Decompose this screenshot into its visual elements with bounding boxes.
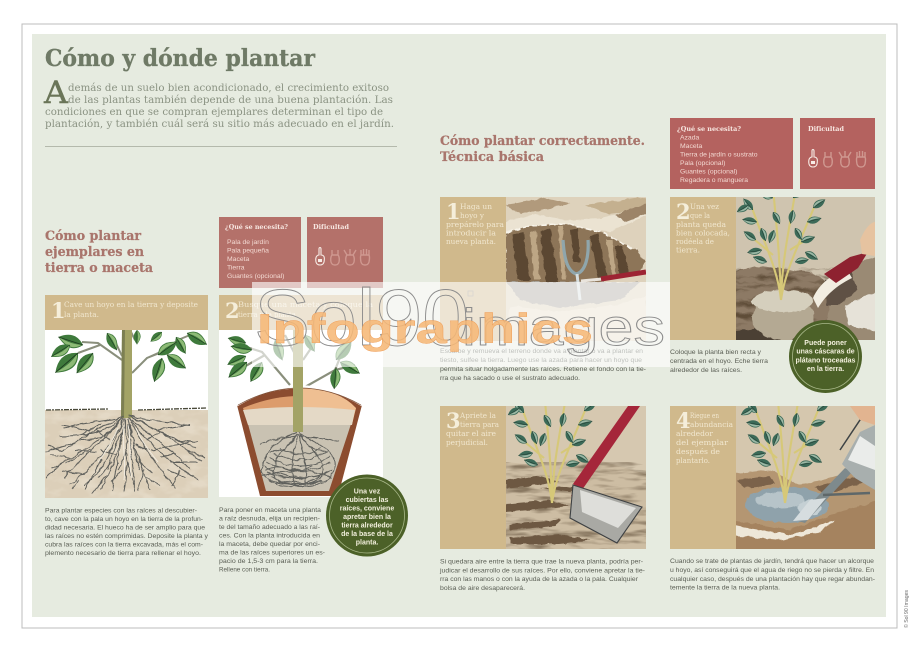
step 1 caption left: Cave un hoyo en la tierra y deposite bbox=[64, 300, 198, 309]
step 3 right: illustration bbox=[506, 406, 646, 549]
heading: left section: Cómo plantar bbox=[45, 229, 141, 244]
step 1 right: text: Escarbe y remueva el terreno donde va a plantar o va a plantar en bbox=[440, 348, 643, 355]
callout: banana peels bbox=[789, 320, 862, 393]
paragraph: step 2 left: ces. Con la planta introducida en bbox=[219, 532, 320, 540]
step 1 caption left: la planta. bbox=[64, 310, 99, 319]
step 3 right: caption: 3 bbox=[446, 408, 461, 433]
step 2 right: caption: que la bbox=[690, 211, 711, 220]
callout: cover roots: Una vez bbox=[354, 488, 381, 496]
step 2 right: text: alrededor de las raíces. bbox=[670, 367, 742, 374]
step 4 right: text: Cuando se trate de plantas de jardín, tendrá que hacer un alcorque bbox=[670, 558, 874, 565]
heading: right section: Cómo plantar correctamente. bbox=[440, 134, 645, 149]
watermark: Sol90 bbox=[254, 273, 469, 362]
step 1 right: text: tiesto, sulfee la tierra. Luego use la azada para hacer un hoyo que bbox=[440, 357, 642, 364]
box: materials right: Pala (opcional) bbox=[680, 160, 725, 167]
step 1 caption left bbox=[45, 295, 208, 330]
step 4 right: caption bbox=[670, 406, 736, 549]
paragraph: step 2 left: ma de las raíces superiores un es- bbox=[219, 550, 325, 556]
step 2 right: text: centrada en el hoyo. Eche tierra bbox=[670, 358, 768, 365]
paragraph: step 1 left: las raíces no estén comprimidas. Deposite la planta y bbox=[45, 533, 209, 540]
illustration: plant in pot bbox=[219, 330, 383, 497]
step 4 right: caption: plantarlo. bbox=[676, 456, 710, 465]
flower pot bbox=[237, 330, 362, 496]
step 3 right: text: judicar el desarrollo de sus raíces. Por ello, conviene apretar la tie- bbox=[439, 568, 645, 574]
paragraph: step 1 left bbox=[45, 508, 209, 557]
watermark: images bbox=[462, 299, 665, 357]
illustration: plant with bare roots bbox=[45, 328, 210, 498]
step 2 right: caption: 2 bbox=[676, 199, 691, 224]
paragraph: step 2 left: Para poner en maceta una planta bbox=[219, 507, 321, 514]
step 4 right: text: u hoyo, así conseguirá que el agua de riego no se pierda y filtre. En bbox=[670, 567, 874, 574]
step 3 right: caption: tierra para bbox=[460, 420, 500, 429]
callout: banana peels: plátano troceadas bbox=[796, 358, 856, 364]
intro text: de las plantas también depende de una buena plantación. Las bbox=[68, 94, 393, 106]
callout: cover roots: tierra alrededor bbox=[341, 522, 393, 530]
step 1 right: caption: introducir la bbox=[446, 228, 497, 238]
step 4 right: caption: Riegue en bbox=[690, 411, 719, 420]
step 2 right: caption: rodéela de bbox=[676, 237, 714, 246]
step 1 right: caption: prepárelo para bbox=[446, 220, 505, 229]
paragraph: step 1 left: Para plantar especies con las raíces al descubier- bbox=[45, 508, 197, 514]
step 1 right: caption: hoyo y bbox=[460, 211, 485, 220]
callout: banana peels: en la tierra. bbox=[807, 366, 844, 373]
paragraph: step 2 left bbox=[219, 507, 325, 574]
step 2 caption left bbox=[219, 295, 383, 330]
image credit: © Sol 90 Images bbox=[903, 589, 910, 628]
step 2 right: text bbox=[670, 349, 768, 374]
box: materials right: ¿Qué se necesita? bbox=[677, 125, 741, 133]
intro text bbox=[43, 75, 394, 130]
callout: cover roots bbox=[326, 474, 408, 556]
callout: cover roots: raíces, conviene bbox=[340, 506, 394, 512]
step 1 right: text: permita situar holgadamente las raíces. Retiene el fondo con la tie- bbox=[440, 366, 646, 373]
step 4 right: text: temente la tierra de la nueva planta. bbox=[670, 584, 780, 592]
step 1 right: text: rra que ha sacado o use el sustrato adecuado. bbox=[440, 375, 580, 382]
step 3 right: text: Si quedara aire entre la tierra que trae la nueva planta, podría per- bbox=[440, 558, 643, 566]
intro text: plantación, y también cuál será su sitio más adecuado en el jardín. bbox=[45, 118, 394, 130]
step 3 right: text: bolsa de aire desaparecerá. bbox=[440, 585, 525, 592]
callout: cover roots: de la base de la bbox=[341, 531, 393, 538]
step 2 right: caption: planta queda bbox=[676, 220, 727, 229]
paragraph: step 2 left: te del tamaño adecuado a las raí- bbox=[219, 524, 320, 531]
box: materials left: Tierra bbox=[227, 264, 245, 272]
paragraph: step 2 left: pacio de 1,5-3 cm para la tierra. bbox=[219, 558, 318, 565]
box: difficulty left: Dificultad bbox=[313, 223, 350, 231]
heading: left section bbox=[45, 229, 154, 276]
title: Cómo y dónde plantar bbox=[45, 44, 316, 72]
step 4 right: caption: después de bbox=[676, 447, 720, 456]
step 2 right: illustration bbox=[736, 197, 875, 340]
step 4 right: illustration bbox=[736, 406, 875, 549]
box: materials left: Pala de jardín bbox=[227, 239, 269, 246]
watermark: Infographics bbox=[257, 305, 593, 352]
box: materials left: Guantes (opcional) bbox=[227, 273, 284, 280]
step 3 right: caption bbox=[440, 406, 506, 549]
step 4 right: caption: del ejemplar bbox=[676, 438, 729, 447]
intro text: demás de un suelo bien acondicionado, el crecimiento exitoso bbox=[68, 82, 389, 94]
step 2 right: caption: Una vez bbox=[690, 202, 719, 211]
box: materials right: Tierra de jardín o sustrato bbox=[680, 152, 758, 158]
step 3 right: text bbox=[439, 558, 645, 592]
box: materials right: Azada bbox=[680, 134, 699, 142]
step 4 right: text: cualquier caso, después de una plantación hay que regar abundan- bbox=[670, 576, 875, 583]
step 4 right: caption: 4 bbox=[676, 408, 691, 433]
step 1 right: text bbox=[440, 348, 646, 382]
step 1 caption left: 1 bbox=[51, 298, 66, 323]
step 2 caption left: 2 bbox=[225, 298, 240, 323]
box: materials right: Maceta bbox=[680, 143, 703, 150]
paragraph: step 2 left: a raíz desnuda, elija un recipien- bbox=[219, 516, 320, 522]
step 2 caption left: tierra y la planta. bbox=[238, 310, 298, 319]
step 3 right: caption: Apriete la bbox=[459, 411, 497, 420]
intro text: A bbox=[43, 75, 69, 111]
paragraph: step 2 left: la maceta, debe quedar por enci- bbox=[219, 541, 320, 548]
step 1 right: caption: Haga un bbox=[460, 202, 492, 211]
box: materials left: Maceta bbox=[227, 256, 250, 263]
step 3 right: caption: perjudicial. bbox=[446, 438, 488, 447]
step 1 right: caption: 1 bbox=[446, 199, 461, 224]
intro text: condiciones en que se compran ejemplares determinan el tipo de bbox=[45, 106, 383, 118]
step 3 right: text: rra con las manos o con la ayuda de la azada o la pala. Cualquier bbox=[440, 576, 639, 583]
callout: cover roots: cubiertas las bbox=[346, 497, 389, 504]
step 4 right: text bbox=[670, 558, 875, 592]
paragraph: step 1 left: to, cave con la pala un hoyo en la tierra de la profun- bbox=[45, 516, 203, 523]
step 2 caption left: Busque una maceta y coloque la bbox=[238, 300, 374, 309]
callout: cover roots: planta. bbox=[356, 540, 378, 546]
step 2 right: caption: bien colocada, bbox=[676, 228, 730, 238]
paragraph: step 1 left: didad necesaria. El hueco ha de ser amplio para que bbox=[45, 524, 205, 532]
heading: left section: ejemplares en bbox=[45, 245, 145, 260]
step 2 right: caption: tierra. bbox=[676, 246, 700, 254]
box: difficulty right: Dificultad bbox=[808, 125, 845, 133]
callout: banana peels: unas cáscaras de bbox=[796, 348, 855, 356]
paragraph: step 2 left: Rellene con tierra. bbox=[219, 566, 270, 574]
step 4 right: caption: alrededor bbox=[676, 429, 714, 438]
box: materials left bbox=[219, 217, 301, 288]
heading: right section bbox=[440, 134, 645, 165]
step 2 right: caption bbox=[670, 197, 736, 340]
paragraph: step 1 left: plemento necesario de tierra para rellenar el hoyo. bbox=[45, 550, 201, 557]
step 2 right: text: Coloque la planta bien recta y bbox=[670, 349, 762, 356]
callout: cover roots: apretar bien la bbox=[343, 514, 391, 521]
step 1 right: caption: nueva planta. bbox=[446, 237, 496, 246]
step 1 right: illustration bbox=[506, 197, 646, 341]
box: difficulty left bbox=[307, 217, 383, 288]
box: materials left: ¿Qué se necesita? bbox=[225, 223, 288, 231]
step 1 right: caption bbox=[440, 197, 506, 341]
box: materials right: Regadera o manguera bbox=[680, 177, 748, 184]
box: materials right: Guantes (opcional) bbox=[680, 168, 737, 176]
box: materials right bbox=[670, 118, 793, 189]
paragraph: step 1 left: cubra las raíces con la tierra excavada, más el com- bbox=[45, 542, 203, 548]
box: difficulty right bbox=[800, 118, 875, 189]
box: materials left: Pala pequeña bbox=[227, 248, 269, 254]
callout: banana peels: Puede poner bbox=[804, 340, 847, 347]
heading: left section: tierra o maceta bbox=[45, 261, 154, 276]
step 4 right: caption: abundancia bbox=[690, 420, 734, 429]
watermark bbox=[252, 273, 670, 367]
heading: right section: Técnica básica bbox=[440, 150, 545, 165]
step 3 right: caption: quitar el aire bbox=[446, 429, 496, 438]
